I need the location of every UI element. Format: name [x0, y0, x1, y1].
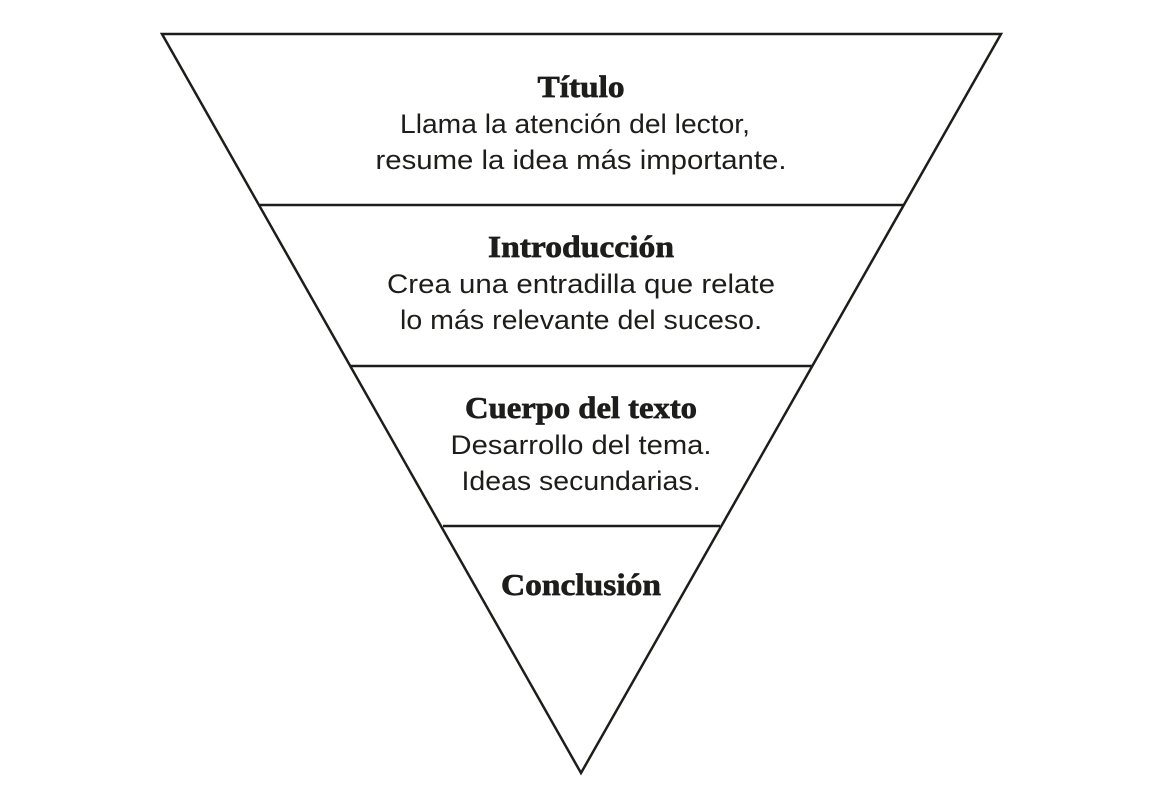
- section: introducción: lo más relevante del suceso.: [400, 305, 762, 335]
- section: conclusión: Conclusión: [501, 567, 661, 602]
- section: título: resume la idea más importante.: [376, 145, 786, 175]
- section: título: Título: [538, 69, 624, 104]
- section: introducción: Introducción: [488, 229, 674, 264]
- section: cuerpo del texto: Desarrollo del tema.: [450, 430, 712, 460]
- section: cuerpo del texto: Cuerpo del texto: [465, 390, 697, 425]
- pyramid outline: [162, 34, 1001, 773]
- section: cuerpo del texto: Ideas secundarias.: [462, 466, 700, 496]
- section: introducción: Crea una entradilla que relate: [387, 269, 775, 299]
- section: introducción: [387, 229, 775, 335]
- section: título: [376, 69, 786, 175]
- section: cuerpo del texto: [450, 390, 712, 496]
- section: título: Llama la atención del lector,: [400, 109, 750, 139]
